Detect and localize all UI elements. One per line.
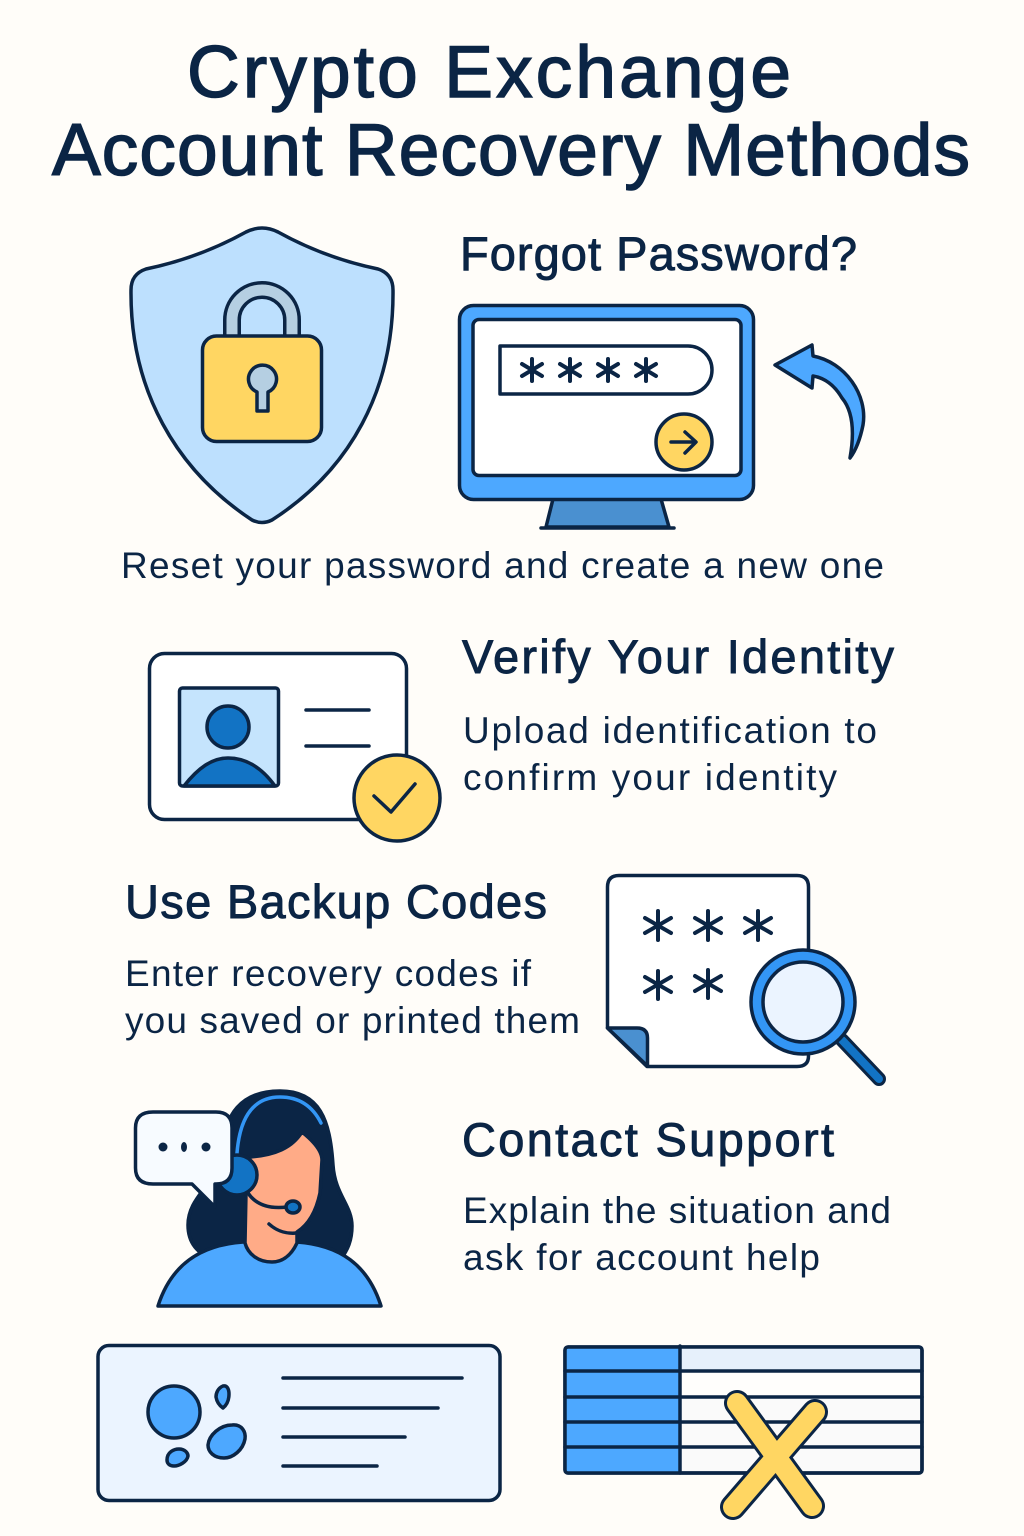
panel: document card with blobs bbox=[98, 1346, 500, 1500]
text: explain situation: ask for account help bbox=[463, 1237, 820, 1278]
icon: ID card with check badge bbox=[150, 654, 440, 841]
panel: table with yellow X bbox=[565, 1346, 922, 1507]
icon: shield with padlock bbox=[131, 228, 393, 522]
text: recovery codes: Enter recovery codes if bbox=[125, 953, 532, 994]
icon: support agent with speech bubble bbox=[136, 1091, 381, 1306]
heading: forgot password: Forgot Password? bbox=[460, 227, 857, 280]
text: upload identification bbox=[463, 710, 877, 798]
title bbox=[52, 32, 970, 191]
title: Crypto Exchange bbox=[187, 32, 791, 113]
text: upload identification: Upload identification to bbox=[463, 710, 877, 751]
title: Account Recovery Methods bbox=[52, 110, 970, 191]
text: recovery codes bbox=[125, 953, 580, 1041]
heading: backup codes: Use Backup Codes bbox=[125, 875, 547, 928]
text: upload identification: confirm your identity bbox=[463, 757, 838, 798]
heading: contact support: Contact Support bbox=[462, 1113, 834, 1166]
arrow: curved back arrow bbox=[775, 345, 864, 458]
heading: verify identity: Verify Your Identity bbox=[462, 630, 894, 683]
icon: computer monitor with password field bbox=[460, 306, 754, 528]
icon: code sheet with magnifier bbox=[608, 876, 879, 1079]
text: reset password: Reset your password and create a new one bbox=[121, 545, 884, 586]
text: explain situation bbox=[463, 1190, 891, 1278]
text: recovery codes: you saved or printed them bbox=[125, 1000, 580, 1041]
text: explain situation: Explain the situation and bbox=[463, 1190, 891, 1231]
